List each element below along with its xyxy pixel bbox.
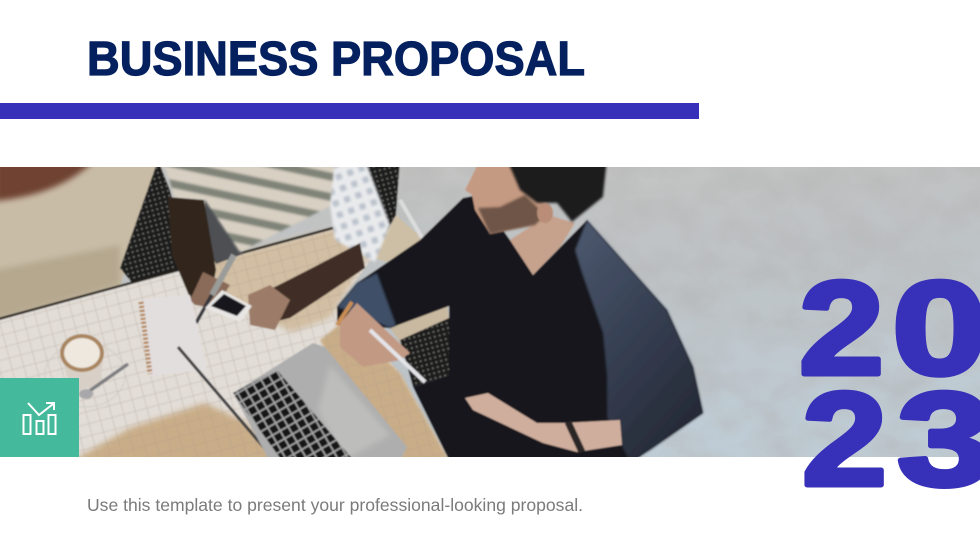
title: BUSINESS PROPOSAL — [87, 33, 585, 86]
subtitle text: Use this template to present your professional-looking proposal. — [87, 495, 583, 515]
photo: team meeting at a cafe table — [0, 160, 980, 462]
year 2023: 2 — [799, 254, 884, 403]
title underline bar — [0, 103, 699, 119]
man in dark shirt — [337, 160, 703, 462]
notebook — [141, 295, 207, 376]
back chairs — [120, 160, 400, 283]
table — [0, 228, 450, 462]
teal badge — [0, 378, 79, 457]
man's hand with pen — [337, 302, 425, 382]
person in striped shirt — [163, 160, 390, 330]
coffee cup and spoon — [45, 334, 128, 407]
icon: bar chart with rising arrow — [24, 403, 56, 434]
man's open hand and bracelet — [465, 393, 622, 452]
laptop — [178, 343, 407, 462]
phone — [205, 290, 252, 322]
year 2023 — [799, 254, 980, 514]
year 2023: 2 — [802, 365, 887, 514]
